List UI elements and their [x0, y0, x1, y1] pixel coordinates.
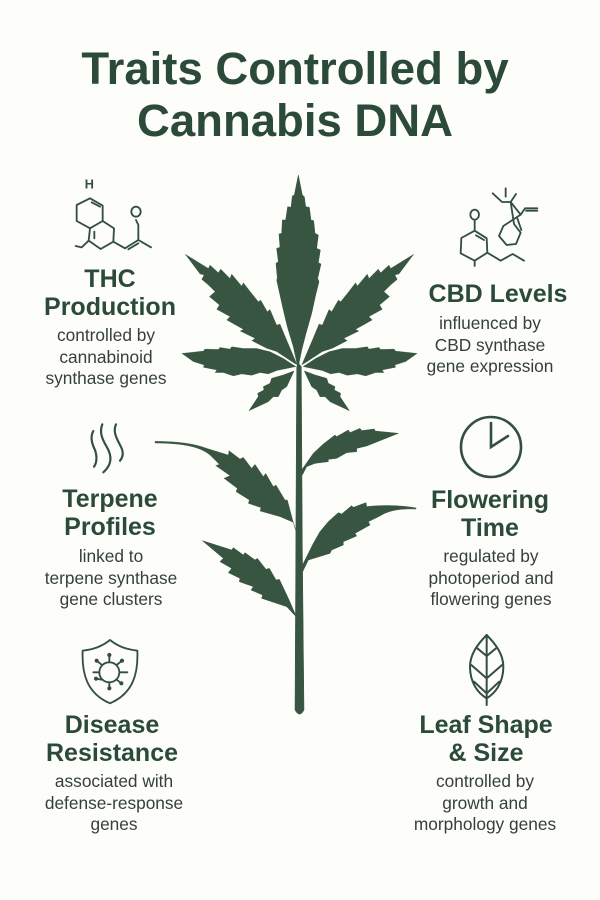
heading: Flowering Time: Time	[461, 514, 519, 542]
text: Leaf description	[414, 771, 556, 834]
text: Flowering description	[429, 546, 553, 609]
title	[81, 43, 509, 146]
text: Disease description: genes	[90, 814, 138, 834]
text: Flowering description: flowering genes	[430, 589, 552, 609]
heading: Terpene Profiles: Terpene	[62, 485, 158, 513]
title: Cannabis DNA	[137, 95, 453, 146]
top center leaflet	[249, 175, 349, 411]
text: Leaf description: controlled by	[436, 771, 534, 791]
heading: Disease Resistance: Disease	[65, 711, 159, 739]
heading: Terpene Profiles	[62, 485, 158, 540]
text: Terpene description: linked to	[79, 546, 143, 566]
heading: Flowering Time	[431, 486, 549, 542]
title: Traits Controlled by	[81, 43, 509, 94]
heading: CBD Levels: CBD Levels	[429, 280, 567, 308]
text: Flowering description: regulated by	[443, 546, 539, 566]
heading: Disease Resistance: Resistance	[46, 738, 178, 766]
text: CBD description: influenced by	[439, 313, 541, 333]
stem	[202, 363, 416, 714]
heading: Flowering Time: Flowering	[431, 486, 549, 514]
upper and horizontal leaflets	[182, 254, 417, 376]
heading: Terpene Profiles: Profiles	[64, 512, 156, 540]
heading: Disease Resistance	[46, 711, 178, 766]
text: Flowering description: photoperiod and	[429, 568, 553, 588]
heading: THC Production: THC	[84, 265, 136, 293]
text: Disease description: defense-response	[45, 792, 183, 812]
heading: THC Production: Production	[44, 292, 176, 320]
heading: Leaf Shape and Size: & Size	[448, 738, 524, 766]
text: Terpene description	[45, 546, 177, 609]
heading: THC Production	[44, 265, 176, 320]
text: CBD description: gene expression	[427, 356, 553, 376]
text: CBD description	[427, 313, 553, 376]
icon: THC molecule: H	[85, 178, 94, 192]
text: Terpene description: terpene synthase	[45, 568, 177, 588]
text: CBD description: CBD synthase	[435, 334, 545, 354]
text: Terpene description: gene clusters	[60, 589, 162, 609]
heading: Leaf Shape and Size: Leaf Shape	[419, 711, 553, 739]
text: Disease description	[45, 771, 183, 834]
text: THC description: controlled by	[57, 325, 155, 345]
text: THC description: cannabinoid	[59, 346, 153, 366]
text: Leaf description: growth and	[442, 792, 528, 812]
text: THC description: synthase genes	[45, 368, 167, 388]
heading: Leaf Shape and Size	[419, 711, 553, 766]
text: Leaf description: morphology genes	[414, 814, 556, 834]
long-tailed left side leaf	[155, 441, 296, 531]
text: Disease description: associated with	[55, 771, 173, 791]
text: THC description	[45, 325, 167, 388]
